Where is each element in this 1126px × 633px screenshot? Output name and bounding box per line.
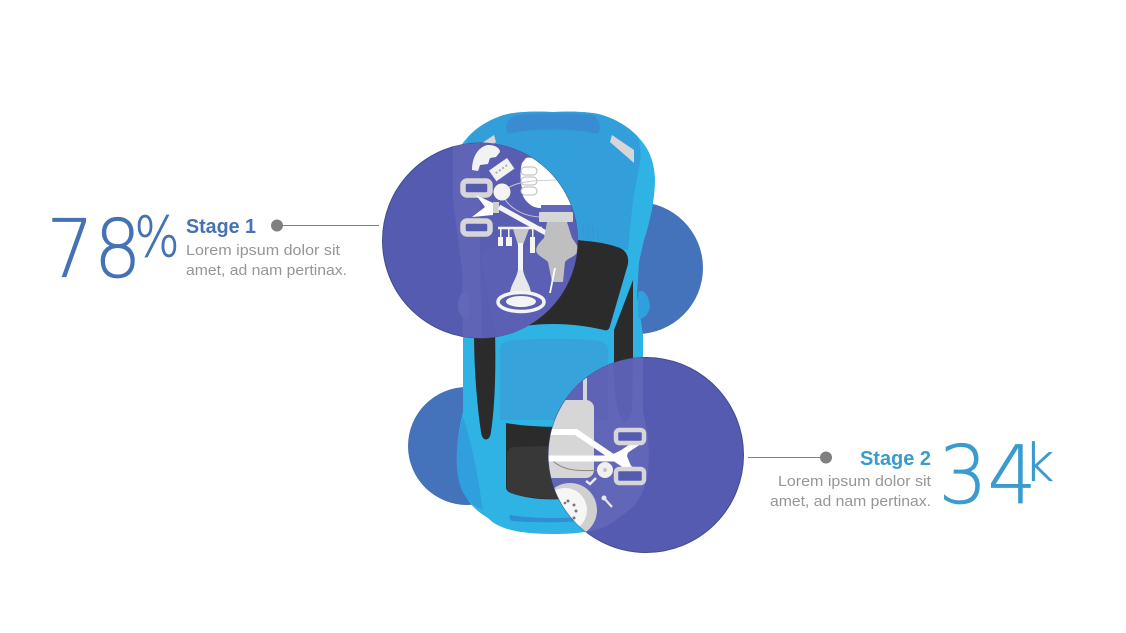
- lower reservoir band: [541, 205, 571, 212]
- stat: 78%: %: [134, 205, 180, 269]
- left side window: [474, 330, 495, 440]
- lower grey frame: [616, 469, 644, 483]
- hood vents: [583, 226, 598, 240]
- background wheel circle: upper right: [571, 202, 703, 334]
- leader line with dot: [271, 220, 379, 232]
- car illustration: [451, 112, 655, 534]
- upper frame part: [463, 181, 490, 195]
- stat: 34k: 34: [938, 429, 1036, 522]
- tire: [543, 483, 597, 537]
- magnifier circle: Stage 2 brakes: [548, 357, 744, 553]
- stem: [583, 378, 587, 402]
- bell: [510, 270, 531, 293]
- sensor circle: [494, 184, 510, 200]
- background wheel circle: lower left: [408, 387, 526, 505]
- funnel: [513, 229, 529, 245]
- check mark: [586, 478, 596, 484]
- windshield: [479, 239, 628, 330]
- grey master cylinder: [548, 400, 594, 478]
- white needle: [550, 268, 555, 293]
- ghost car body: [548, 358, 649, 532]
- left rear fender: [457, 417, 483, 510]
- reservoir capsules: [521, 167, 537, 195]
- white reservoir block: [520, 158, 571, 208]
- white junction arrow: [614, 450, 631, 466]
- right side window: [614, 280, 633, 375]
- magnifier circle: Stage 1 engine: [382, 142, 578, 338]
- ghost hood: [480, 140, 628, 345]
- circle base: [382, 143, 578, 338]
- left headlight: [472, 135, 496, 163]
- right mirror: [638, 291, 650, 318]
- stage 2 callout: [748, 429, 1054, 522]
- circle base: [548, 358, 744, 552]
- thin curve: [552, 462, 597, 472]
- comb hangers: [498, 229, 535, 253]
- ghost side window: [613, 350, 633, 421]
- grey pump: [536, 222, 578, 282]
- stat: 78%: 78: [46, 203, 142, 296]
- car body: [451, 112, 655, 534]
- rear window: [506, 423, 604, 499]
- upper grey frame: [616, 430, 644, 443]
- ghost panel: [568, 370, 598, 397]
- wrench: [603, 497, 612, 507]
- top air intake: [506, 114, 600, 134]
- white horizontal pipe: [548, 445, 640, 462]
- ghost mirror: [458, 293, 462, 316]
- ghost roof bulge: [481, 246, 580, 340]
- leader line with dot: [748, 452, 832, 464]
- stage 1 callout: [46, 203, 379, 296]
- right headlight: [610, 135, 634, 163]
- sensor: [597, 462, 613, 478]
- heading: Stage 2: Stage 2: [860, 448, 931, 470]
- white angled pipe: [550, 429, 633, 467]
- tire studs: [564, 500, 578, 520]
- lower frame part: [463, 221, 490, 234]
- hood panel: [465, 112, 641, 250]
- stage 1 callout: amet, ad nam pertinax.: [186, 263, 347, 279]
- heading: Stage 1: Stage 1: [186, 216, 256, 238]
- stage 2 callout: amet, ad nam pertinax.: [770, 494, 931, 510]
- stat: 34k: k: [1024, 434, 1054, 494]
- stem: [518, 243, 523, 273]
- white junction arrow: [472, 195, 493, 217]
- roof: [500, 339, 608, 420]
- white dome part: [472, 145, 500, 171]
- main pipe: [499, 207, 546, 233]
- description: Lorem ipsum dolor sit: [186, 243, 340, 259]
- small rotated fuse box: [489, 158, 514, 181]
- rear window inner panel: [507, 446, 600, 499]
- connector wires: [505, 180, 557, 218]
- grey connector: [493, 202, 499, 213]
- ring outer: [498, 292, 544, 312]
- description: Lorem ipsum dolor sit: [778, 474, 931, 490]
- comb rail: [498, 227, 542, 229]
- ghost car body: [453, 143, 578, 338]
- grey top bar: [539, 212, 573, 222]
- rear stripe: [509, 515, 597, 522]
- ring inner: [506, 296, 536, 307]
